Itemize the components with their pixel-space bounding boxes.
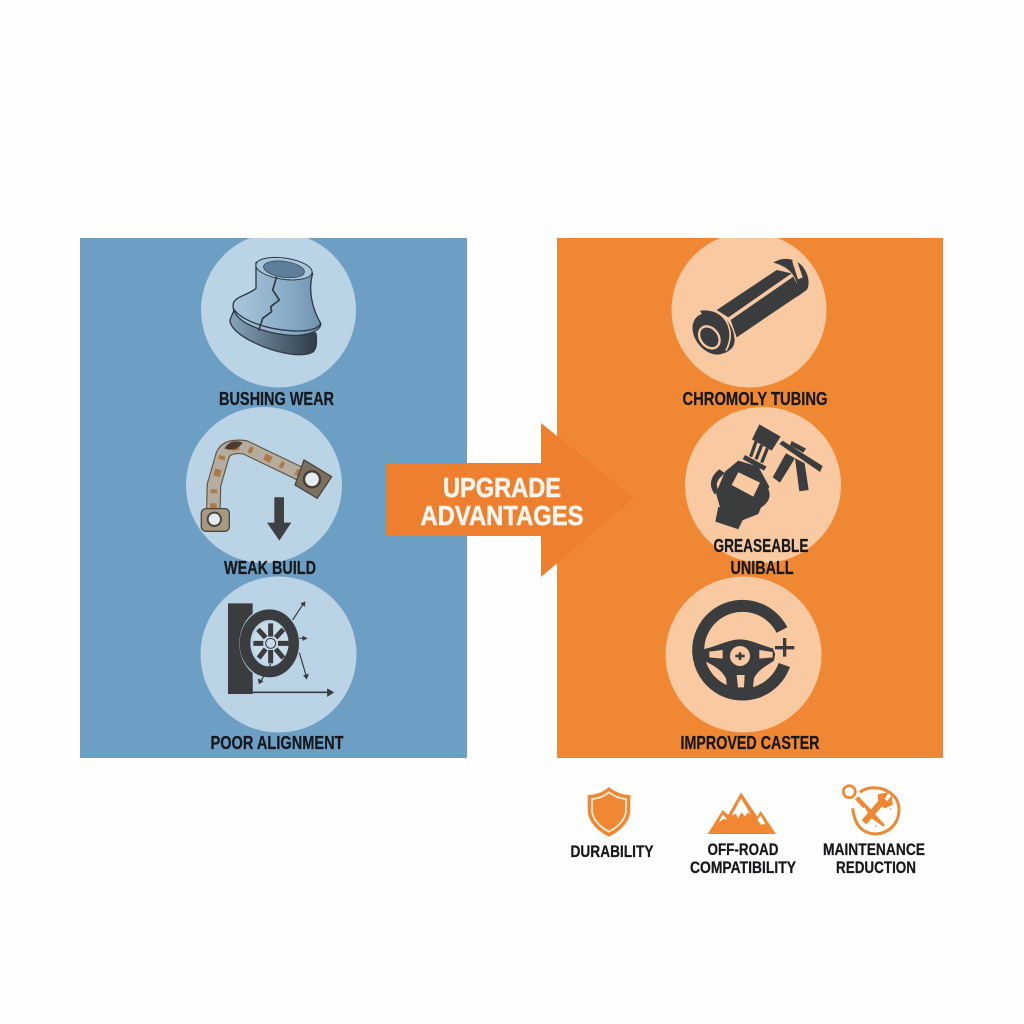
icon: rusty control arm <box>201 441 332 541</box>
label: maintenance reduction: REDUCTION <box>836 858 916 877</box>
circle: chromoly tubing <box>672 232 826 388</box>
label: improved caster: IMPROVED CASTER <box>680 733 820 753</box>
icon: steering wheel with plus <box>698 606 796 698</box>
label: chromoly tubing: CHROMOLY TUBING <box>682 389 828 409</box>
icon: shield <box>588 787 630 837</box>
label: maintenance reduction <box>823 840 925 877</box>
panel: problems <box>80 232 467 758</box>
label: greaseable uniball <box>714 536 808 578</box>
label: maintenance reduction: MAINTENANCE <box>823 840 925 859</box>
circle: improved caster <box>666 576 822 732</box>
circle: poor alignment <box>200 576 356 732</box>
icon: mountain <box>708 792 776 834</box>
label: off-road compatibility: OFF-ROAD <box>708 840 778 859</box>
icon: tools in circle <box>843 786 899 834</box>
label: poor alignment: POOR ALIGNMENT <box>210 733 344 753</box>
panel: upgrades <box>557 232 943 758</box>
label: bushing wear: BUSHING WEAR <box>219 389 334 409</box>
label: weak build: WEAK BUILD <box>224 558 316 578</box>
label: durability: DURABILITY <box>570 842 654 861</box>
arrow label <box>420 472 584 531</box>
arrow label: ADVANTAGES <box>420 500 584 531</box>
circle: greaseable uniball <box>685 407 841 563</box>
label: off-road compatibility: COMPATIBILITY <box>690 858 797 877</box>
benefits row <box>570 786 925 877</box>
icon: cracked bushing <box>230 254 321 355</box>
arrow: upgrade advantages <box>386 423 634 577</box>
icon: uniball and grease gun <box>711 424 823 529</box>
circle: bushing wear <box>201 232 356 388</box>
label: greaseable uniball: GREASEABLE <box>714 536 808 556</box>
circle: weak build <box>186 407 342 563</box>
label: off-road compatibility <box>690 840 797 877</box>
icon: chromoly tube <box>685 259 809 362</box>
icon: misaligned wheel <box>228 602 334 697</box>
arrow label: UPGRADE <box>443 472 561 503</box>
label: greaseable uniball: UNIBALL <box>730 558 794 578</box>
